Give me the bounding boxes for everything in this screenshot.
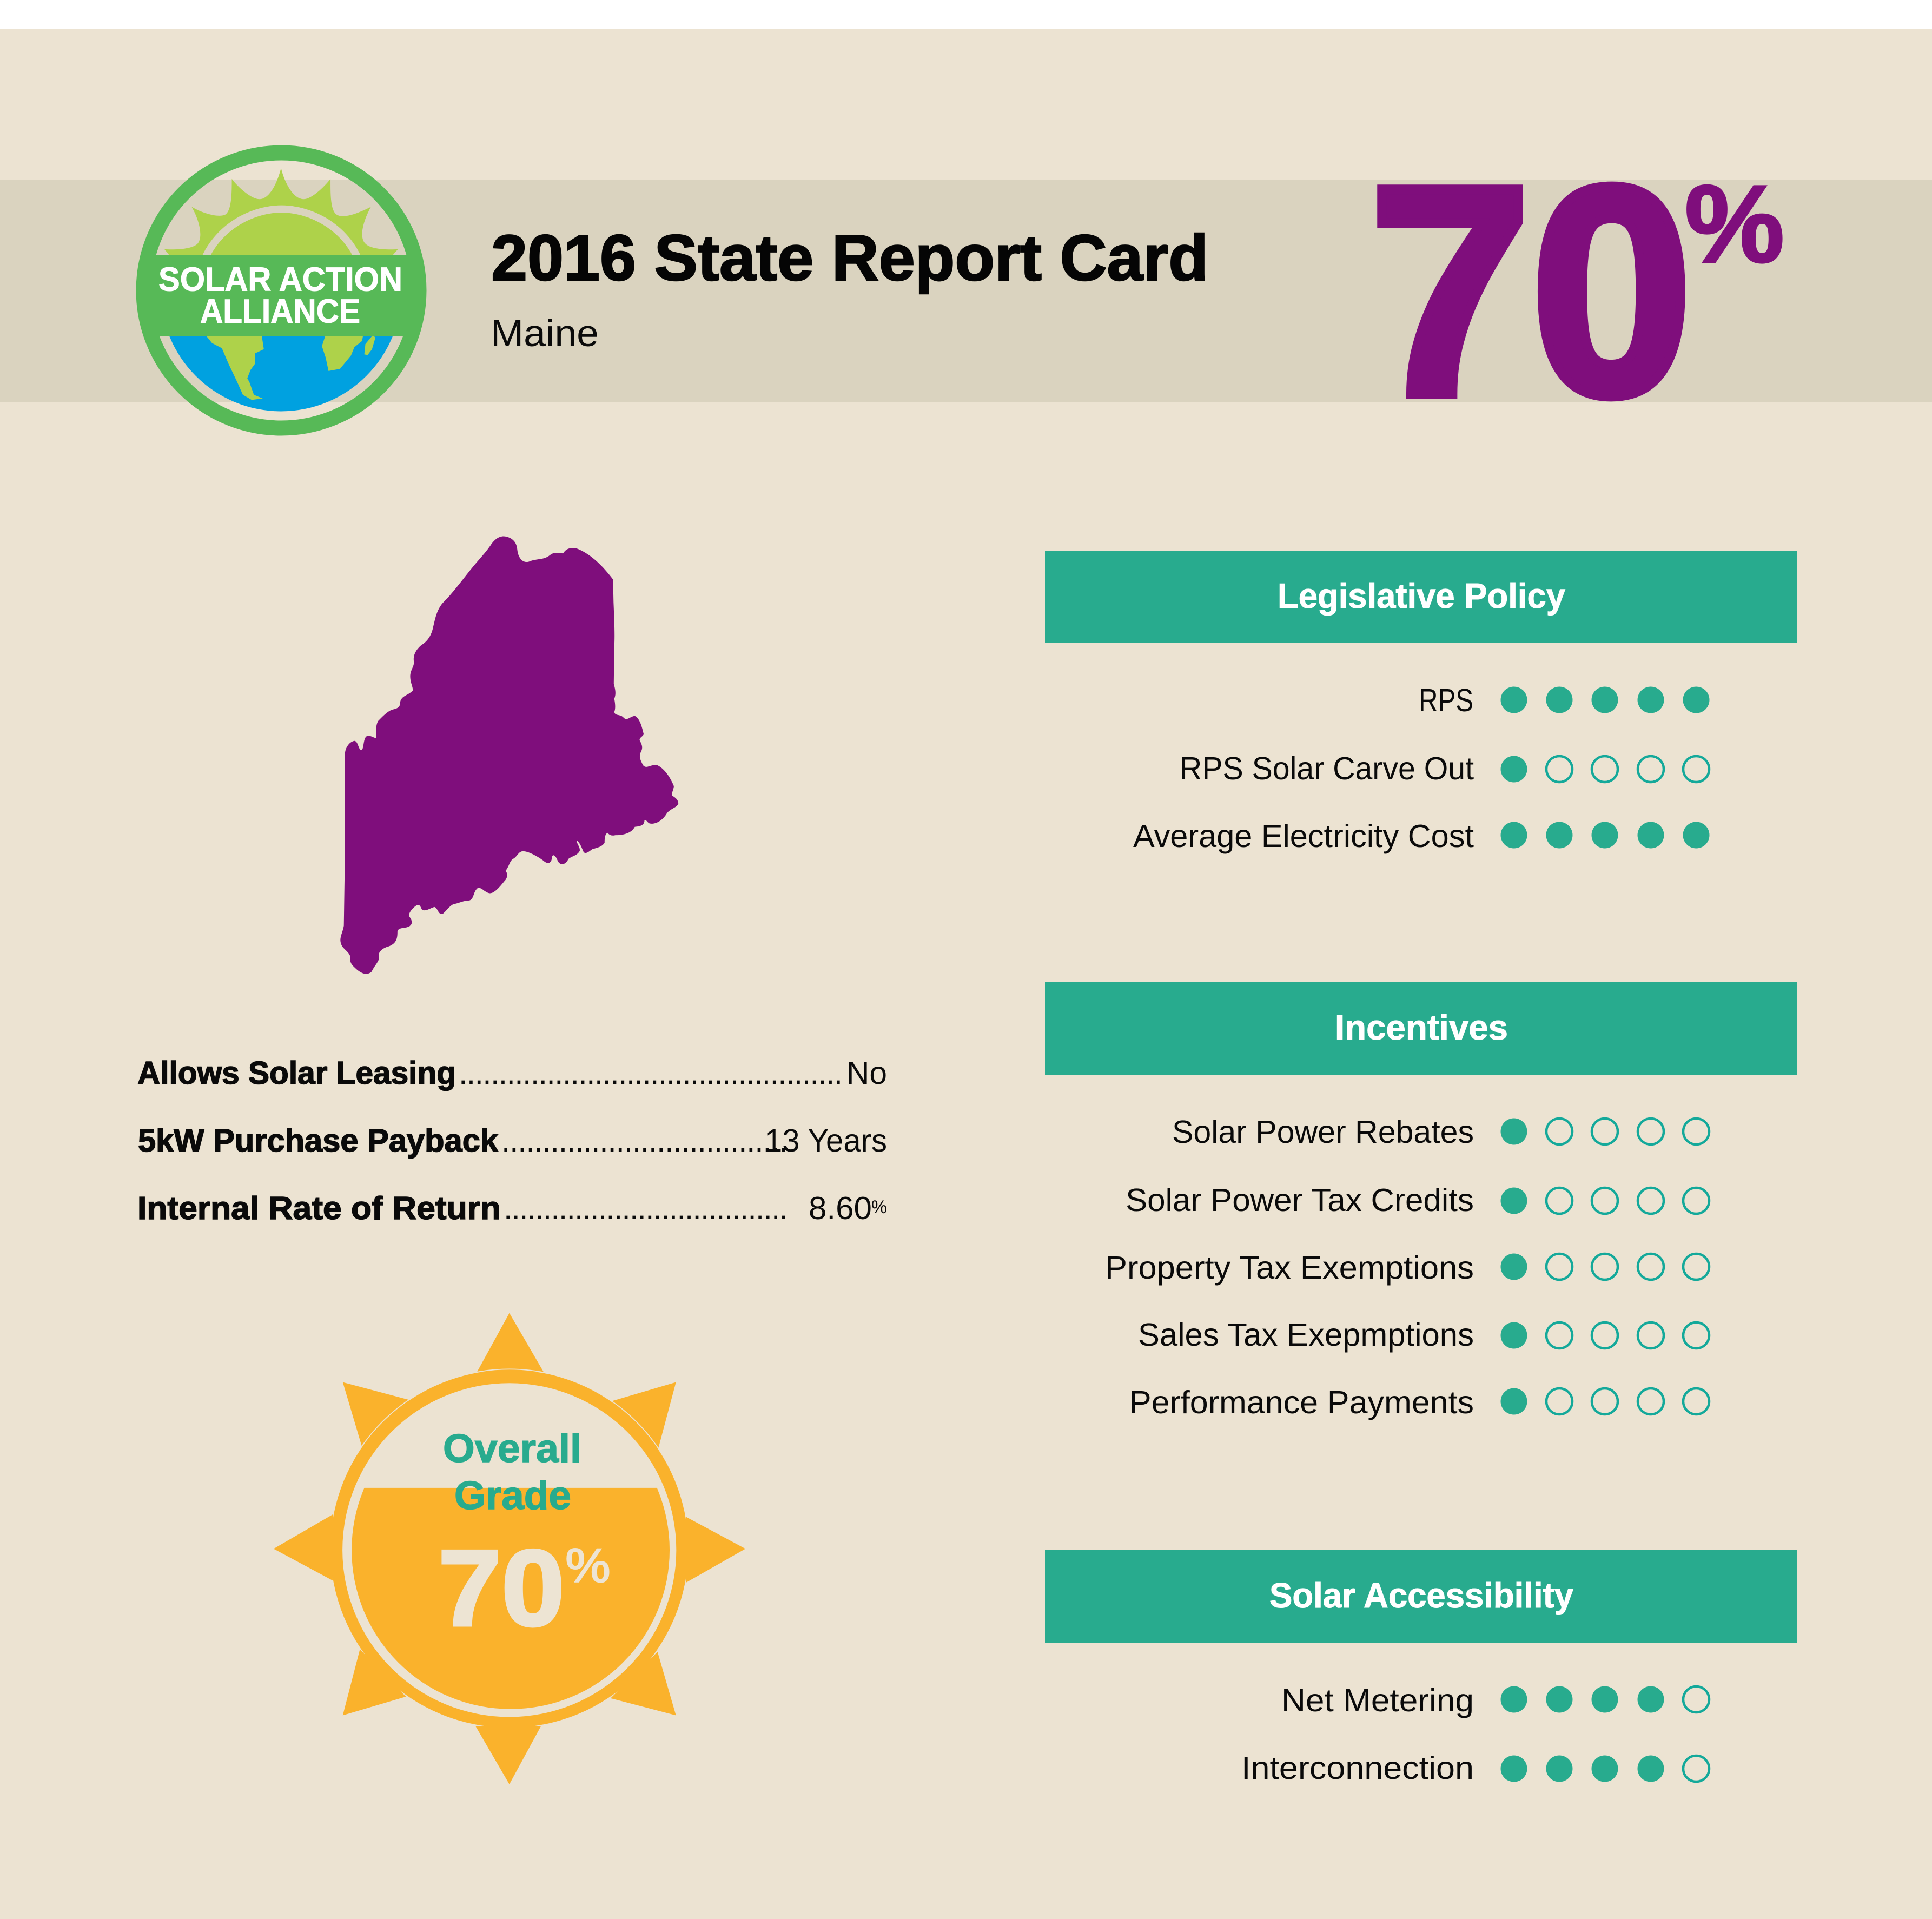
row: average electricity cost [1133,818,1709,854]
stat: solar leasing: ................................................ [459,1055,843,1091]
overall grade score: % [565,1538,611,1593]
stat: purchase payback [138,1123,887,1159]
row: net metering: Net Metering [1281,1683,1474,1718]
panel: solar accessibility [1045,1550,1797,1786]
title: 2016 State Report Card [491,222,1208,294]
logo text: ALLIANCE [200,293,360,330]
overall grade label: Overall [443,1427,581,1471]
header: solar accessibility: Solar Accessibility [1269,1576,1573,1615]
stat: internal rate of return [137,1190,887,1226]
row: solar power tax credits [1126,1182,1709,1218]
row: sales tax exepmptions: Sales Tax Exepmptions [1138,1317,1474,1353]
logo sun and globe [161,168,401,411]
header: legislative policy: Legislative Policy [1278,576,1565,616]
overall grade score [438,1528,611,1649]
header: incentives: Incentives [1335,1008,1508,1047]
stat: internal rate of return: % [871,1197,887,1217]
row: property tax exemptions [1105,1250,1709,1286]
row: RPS solar carve out [1180,751,1709,786]
row: RPS solar carve out: RPS Solar Carve Out [1180,751,1474,786]
logo banner [151,255,411,336]
row: sales tax exepmptions [1138,1317,1709,1353]
overall grade label: Grade [454,1474,571,1518]
row: performance payments: Performance Payments [1129,1385,1474,1420]
row: RPS: RPS [1419,683,1473,718]
row: interconnection [1241,1750,1709,1786]
row: average electricity cost: Average Electricity Cost [1133,818,1474,854]
sun graphic [274,1313,745,1784]
row: performance payments [1129,1385,1709,1420]
row: solar power rebates [1172,1114,1709,1150]
panel: legislative policy [1045,551,1797,854]
stat: internal rate of return: Internal Rate of Return [137,1190,501,1226]
row: solar power tax credits: Solar Power Tax Credits [1126,1182,1474,1218]
header band [0,180,1932,402]
stat: solar leasing [137,1055,887,1091]
logo text [158,261,402,330]
stat: purchase payback: ................................... [501,1123,788,1159]
header: incentives [1045,982,1797,1075]
logo: Solar Action Alliance [135,153,427,428]
map: Maine [340,536,678,974]
overall grade sun badge [274,1313,745,1784]
big score 70%: 70 [1369,125,1692,457]
row: net metering [1281,1683,1709,1718]
stat: internal rate of return: .................................... [504,1190,788,1226]
header: solar accessibility [1045,1550,1797,1643]
overall grade score: 70 [438,1528,565,1649]
row: RPS [1419,683,1709,718]
row: property tax exemptions: Property Tax Exemptions [1105,1250,1474,1286]
overall grade label [443,1427,581,1518]
header: legislative policy [1045,551,1797,643]
stat: purchase payback: 13 Years [765,1123,887,1159]
big score 70%: % [1685,163,1784,286]
row: interconnection: Interconnection [1241,1750,1474,1786]
stats list [137,1055,887,1226]
stat: solar leasing: No [846,1055,887,1091]
panel: incentives [1045,982,1797,1420]
logo ring [144,153,419,428]
stat: solar leasing: Allows Solar Leasing [137,1055,456,1091]
stat: internal rate of return: 8.60 [809,1190,872,1226]
logo text: SOLAR ACTION [158,261,402,299]
row: solar power rebates: Solar Power Rebates [1172,1114,1474,1150]
subtitle: state name: Maine [491,312,599,354]
stat: purchase payback: 5kW Purchase Payback [138,1123,498,1159]
